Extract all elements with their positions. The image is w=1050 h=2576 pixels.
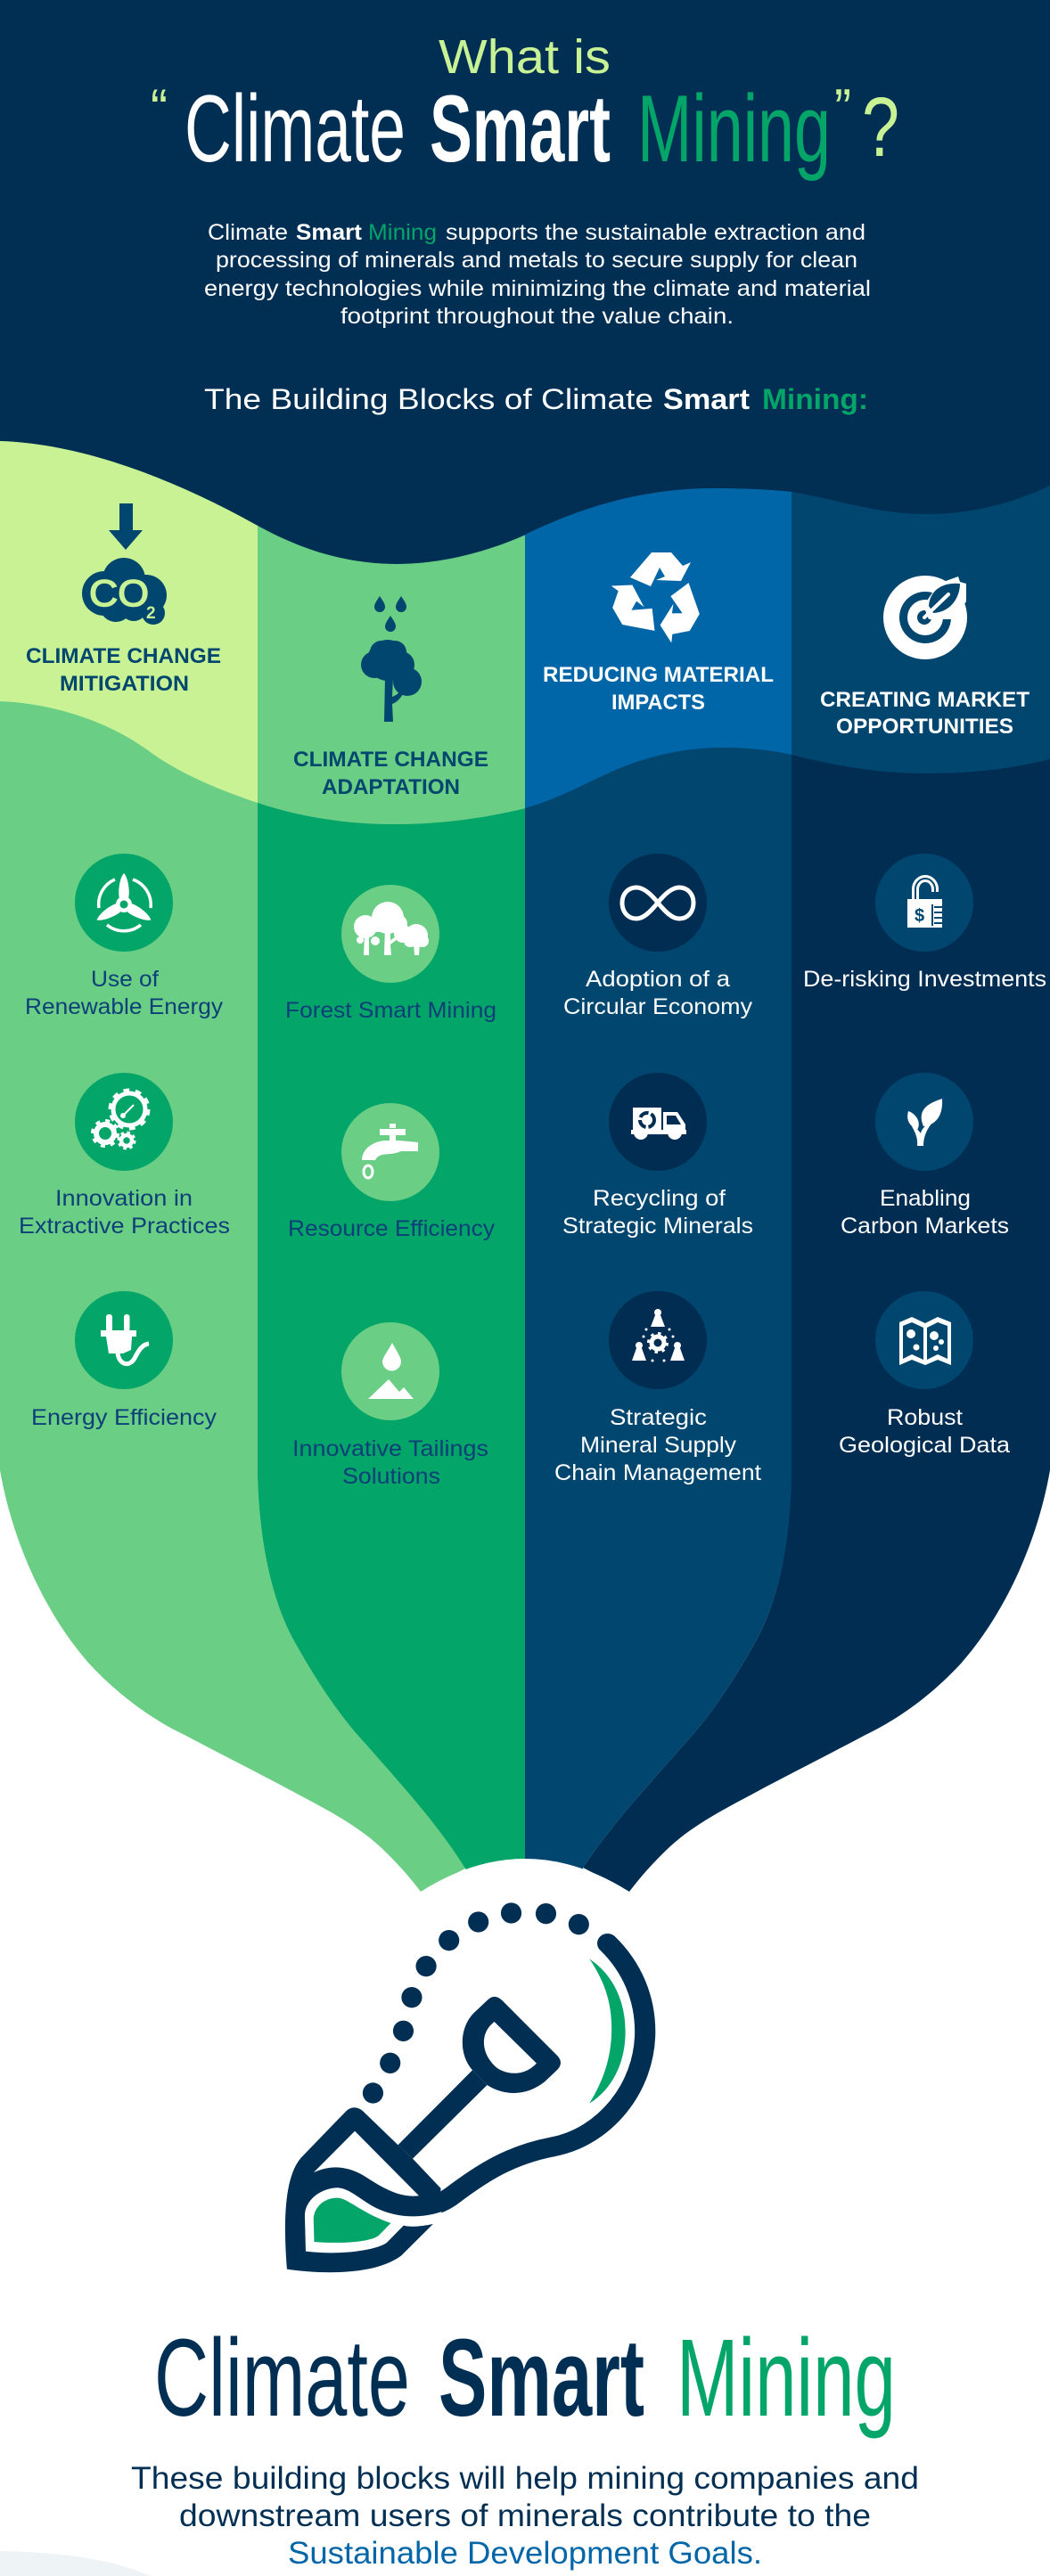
panel: navy header background <box>0 0 1050 624</box>
blade lower cutout <box>305 2188 442 2253</box>
subheading: building blocks <box>204 383 868 415</box>
bottom title: Smart <box>439 2318 644 2440</box>
heading: creating market opportunities: OPPORTUNITIES <box>836 715 1013 739</box>
closing paragraph: downstream users of minerals contribute to the <box>179 2498 871 2533</box>
intro paragraph: Smart <box>296 220 363 245</box>
bottom title: Mining <box>677 2318 896 2440</box>
logo: shovel light bulb <box>285 1902 645 2272</box>
label: forest smart mining: Forest Smart Mining <box>285 998 496 1023</box>
main title: ? <box>862 80 899 175</box>
shovel shaft <box>398 2070 488 2159</box>
shovel blade <box>285 2107 441 2272</box>
icon: electric plug <box>75 1291 173 1389</box>
label: innovative tailings solutions <box>292 1436 488 1489</box>
icon: CO2 cloud with down arrow: CO <box>89 572 149 614</box>
heading: creating market opportunities: CREATING MARKET <box>820 688 1029 712</box>
icon: infinity loop <box>609 854 707 952</box>
label: de-risking investments: De-risking Investments <box>803 967 1046 992</box>
icon: tailings drop and mountain <box>341 1322 439 1420</box>
blade upper cutout <box>314 2131 419 2196</box>
bulb outline <box>411 1943 645 2207</box>
icon: folded world map <box>875 1291 973 1389</box>
panel: column 1 climate change mitigation <box>0 441 467 1892</box>
icon: wind turbine <box>75 854 173 952</box>
subheading: building blocks: The Building Blocks of Climate <box>204 383 653 415</box>
label: innovation in extractive practices <box>19 1186 230 1239</box>
label: robust geological data: Geological Data <box>839 1433 1010 1458</box>
label: recycling of strategic minerals: Strategic Minerals <box>562 1214 753 1239</box>
intro paragraph: footprint throughout the value chain. <box>340 304 734 329</box>
subheading: building blocks: Mining: <box>762 383 868 415</box>
bottom title <box>154 2318 896 2440</box>
icon: tree with water drops <box>361 596 422 722</box>
label: adoption of a circular economy <box>563 967 753 1019</box>
closing paragraph <box>131 2461 919 2571</box>
intro paragraph: Climate <box>208 220 288 245</box>
heading: reducing material impacts: REDUCING MATERIAL <box>543 663 774 687</box>
heading: climate change adaptation <box>293 748 488 799</box>
label: strategic mineral supply chain management <box>554 1405 761 1485</box>
icon: CO2 cloud with down arrow <box>82 503 167 625</box>
heading: climate change adaptation: CLIMATE CHANGE <box>293 748 488 772</box>
label: innovative tailings solutions: Innovative Tailings <box>292 1436 488 1461</box>
main title: Climate <box>185 75 406 182</box>
green highlight <box>589 1959 626 2104</box>
green soil <box>314 2198 390 2243</box>
icon: water faucet <box>341 1103 439 1201</box>
label: innovative tailings solutions: Solutions <box>342 1464 440 1489</box>
label: innovation in extractive practices: Innovation in <box>55 1186 193 1211</box>
panel: column 2 climate change adaptation <box>258 526 526 1871</box>
intro paragraph: Mining <box>368 220 437 245</box>
closing paragraph: These building blocks will help mining companies and <box>131 2461 919 2496</box>
icon: recycling truck <box>609 1073 707 1171</box>
label: robust geological data <box>839 1405 1010 1458</box>
bottom title: Climate <box>154 2318 410 2440</box>
icon: CO2 cloud with down arrow: 2 <box>146 604 156 623</box>
heading: climate change adaptation: ADAPTATION <box>322 775 460 799</box>
label: enabling carbon markets: Enabling <box>880 1186 971 1211</box>
icon: supply chain network <box>609 1291 707 1389</box>
label: enabling carbon markets: Carbon Markets <box>841 1214 1009 1239</box>
shovel handle grip <box>463 1997 561 2093</box>
panel: column 3 reducing material impacts <box>525 488 792 1871</box>
label: energy efficiency: Energy Efficiency <box>31 1405 217 1430</box>
dotted bulb arc <box>363 1902 589 2104</box>
label: adoption of a circular economy: Adoption of a <box>586 967 730 992</box>
label: strategic mineral supply chain management: Strategic <box>610 1405 707 1430</box>
intro paragraph <box>204 220 871 329</box>
label: strategic mineral supply chain management: Mineral Supply <box>580 1433 737 1458</box>
heading: climate change mitigation <box>26 644 221 696</box>
label: enabling carbon markets <box>841 1186 1009 1239</box>
main title: What is <box>439 30 611 84</box>
label: resource efficiency: Resource Efficiency <box>288 1216 496 1241</box>
icon: sprout with leaves <box>875 1073 973 1171</box>
label: strategic mineral supply chain management: Chain Management <box>554 1460 761 1485</box>
intro paragraph: energy technologies while minimizing the climate and material <box>204 276 871 301</box>
icon: forest trees <box>341 885 439 983</box>
label: use of renewable energy: Use of <box>91 967 159 992</box>
label: use of renewable energy: Renewable Energy <box>25 994 224 1019</box>
decorative corner shape <box>0 2551 151 2576</box>
label: recycling of strategic minerals: Recycling of <box>593 1186 726 1211</box>
main title <box>151 30 899 182</box>
main title: “ <box>151 78 168 138</box>
heading: climate change mitigation: MITIGATION <box>60 672 189 696</box>
label: robust geological data: Robust <box>887 1405 963 1430</box>
label: adoption of a circular economy: Circular Economy <box>563 994 753 1019</box>
icon: recycling arrows <box>603 552 710 648</box>
closing paragraph: Sustainable Development Goals. <box>288 2536 762 2571</box>
heading: reducing material impacts: IMPACTS <box>611 691 705 715</box>
icon: gears with shovel <box>75 1073 173 1171</box>
main title: Mining <box>637 75 831 182</box>
label: recycling of strategic minerals <box>562 1186 753 1239</box>
icon: padlock with dollar: $ <box>915 906 924 926</box>
intro paragraph: processing of minerals and metals to secure supply for clean <box>216 248 857 273</box>
heading: creating market opportunities <box>820 688 1029 739</box>
label: innovation in extractive practices: Extractive Practices <box>19 1214 230 1239</box>
heading: climate change mitigation: CLIMATE CHANGE <box>26 644 221 668</box>
icon: target with leaf <box>883 576 967 659</box>
heading: reducing material impacts <box>543 663 774 715</box>
main title: ” <box>834 78 851 138</box>
icon: padlock with dollar <box>875 854 973 952</box>
subheading: building blocks: Smart <box>663 383 750 415</box>
intro paragraph: supports the sustainable extraction and <box>446 220 865 245</box>
panel: column 4 creating market opportunities <box>583 486 1050 1892</box>
main title: Smart <box>430 75 611 182</box>
label: use of renewable energy <box>25 967 224 1019</box>
